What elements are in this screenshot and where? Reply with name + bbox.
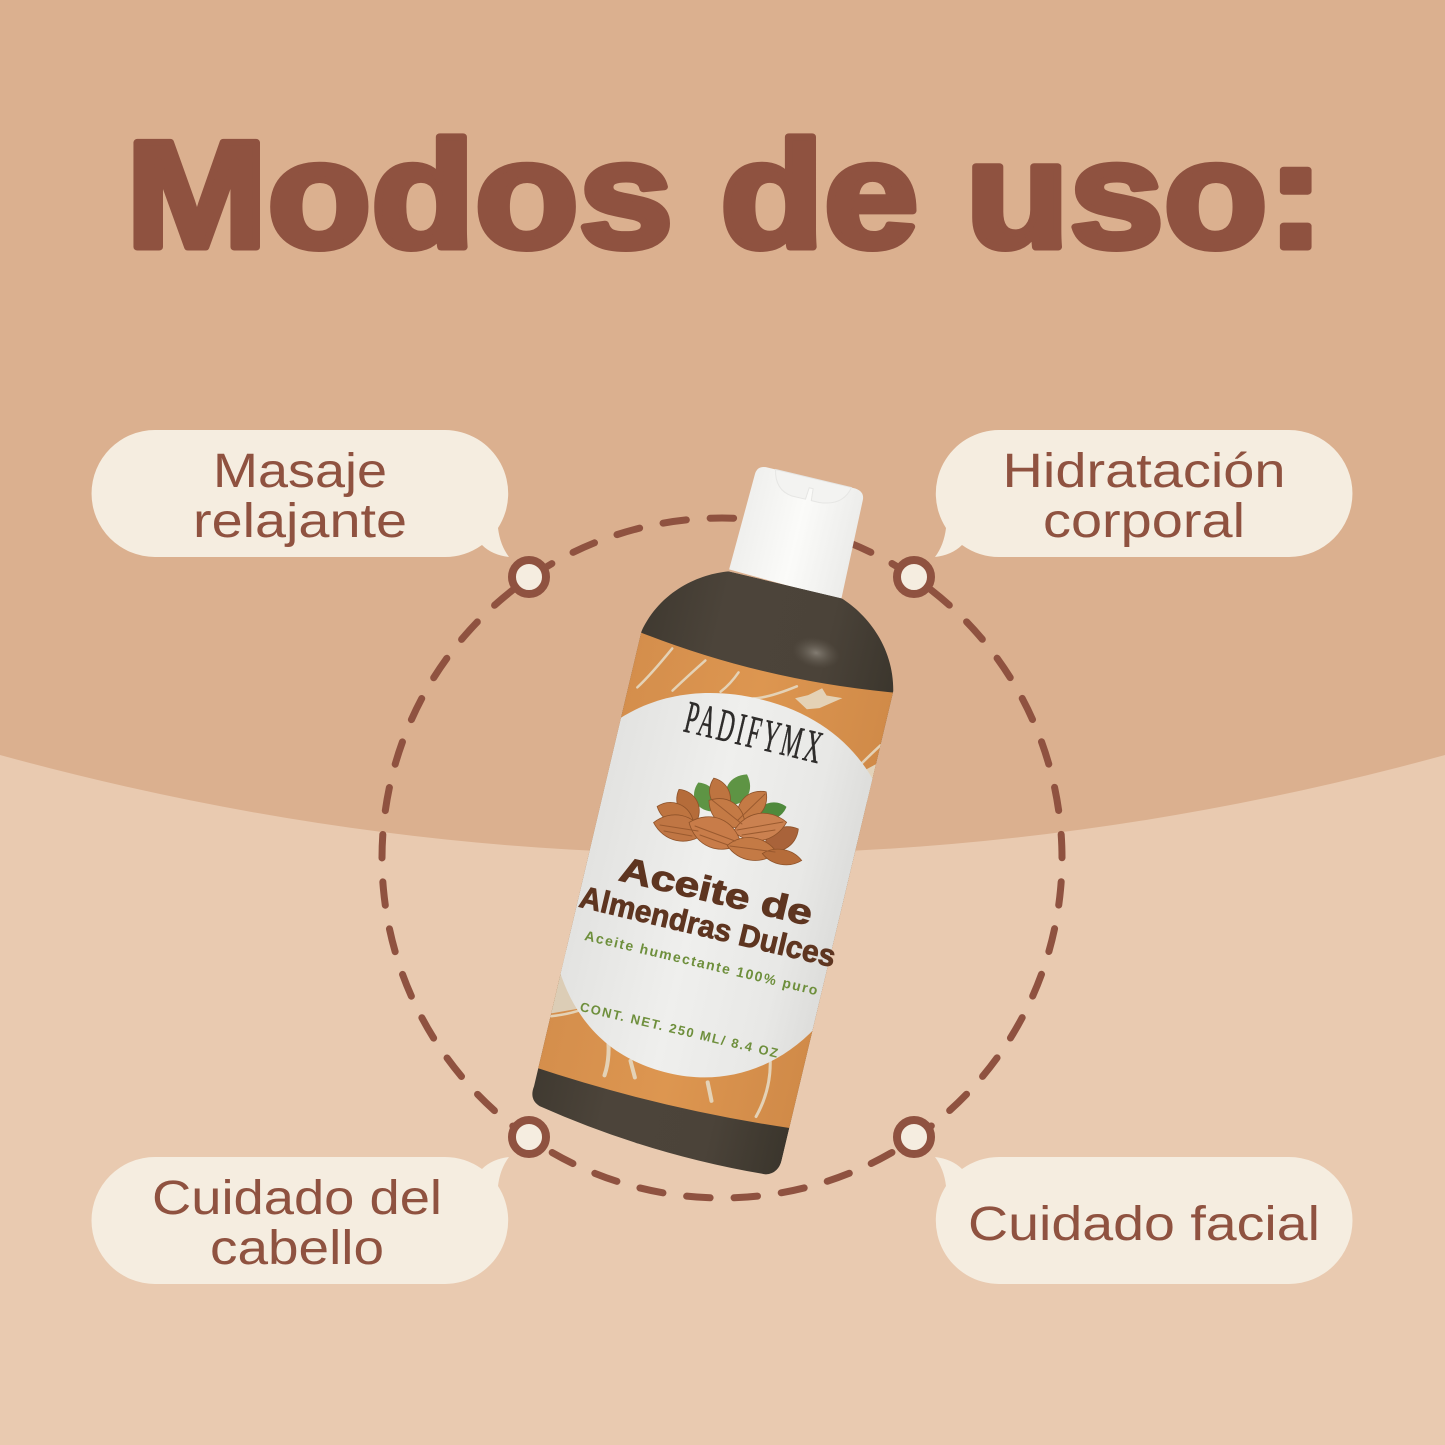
orange band [530,630,898,1135]
icon: almonds [651,769,804,868]
title: Modos de uso: [126,110,1324,280]
net content: CONT. NET. 250 ML/ 8.4 OZ [579,999,780,1061]
callout: masaje relajante [92,430,509,557]
product name line 2: Almendras Dulces [576,879,839,974]
product name line 1: Aceite de [616,850,816,933]
callout: cuidado del cabello: Cuidado del [152,1172,442,1225]
subtitle: Aceite humectante 100% puro [583,927,819,998]
callout: masaje relajante: relajante [193,495,407,548]
dashed circle [370,506,1074,1210]
node: bottom left [512,1120,546,1154]
callout: hidratacion corporal: corporal [1043,495,1245,548]
product bottle [532,467,894,1174]
node: bottom right [897,1120,931,1154]
cream streaks [539,641,891,1125]
bottle cap [728,464,867,600]
callout: cuidado del cabello: cabello [210,1222,384,1275]
background upper arc [0,0,1445,854]
almond ridges [660,794,783,852]
callout: hidratacion corporal: Hidratación [1002,445,1286,498]
white label [560,693,872,1078]
callout: cuidado facial [935,1157,1352,1284]
callout: masaje relajante: Masaje [213,445,387,498]
brand name: PADIFYMX [680,692,830,774]
callout: cuidado del cabello [92,1157,509,1284]
node: top right [897,560,931,594]
bottle body [532,571,894,1174]
node: top left [512,560,546,594]
callout: hidratacion corporal [935,430,1352,557]
callout: cuidado facial: Cuidado facial [968,1198,1320,1251]
